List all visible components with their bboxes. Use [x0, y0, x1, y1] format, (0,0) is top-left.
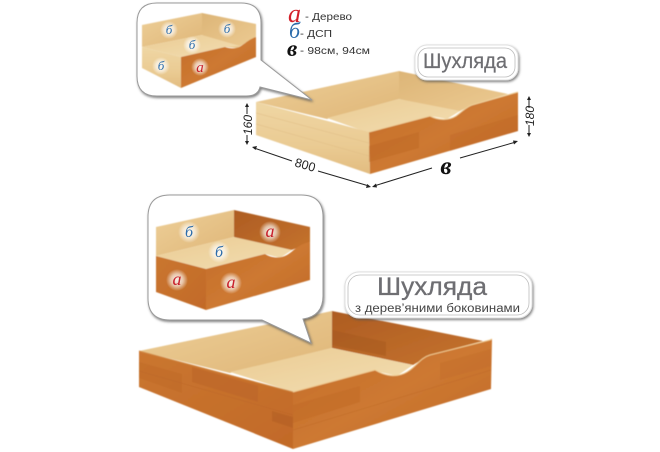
legend: - ДСП	[300, 28, 332, 40]
badge: Шухляда з дерев'яними боковинами: Шухляда	[377, 273, 487, 301]
callout: lower drawer materials	[148, 195, 323, 343]
labels: upper inset letters	[152, 20, 236, 76]
legend: б	[289, 18, 301, 43]
dimension: 160: 160	[241, 115, 255, 135]
badge: Шухляда	[415, 45, 518, 80]
badge: Шухляда з дерев'яними боковинами: з дерев’яними боковинами	[355, 303, 520, 315]
labels: lower inset letters: а	[226, 272, 236, 292]
labels: lower inset letters	[166, 221, 281, 294]
inset: lower drawer corner	[156, 210, 310, 310]
dimension: 800	[252, 146, 371, 188]
dimension: 160	[241, 103, 255, 145]
callout: upper drawer materials	[137, 3, 312, 100]
legend: в	[287, 36, 297, 61]
badge: Шухляда: Шухляда	[423, 50, 507, 73]
dimension: в: в	[440, 153, 452, 180]
labels: lower inset letters: б	[215, 244, 224, 261]
inset: upper drawer corner	[142, 13, 256, 88]
labels: upper inset letters: б	[189, 37, 196, 52]
drawer: lower drawer	[139, 311, 492, 449]
labels: lower inset letters: а	[172, 269, 182, 289]
dimension: 180	[523, 96, 537, 137]
dimension: 180: 180	[523, 106, 537, 126]
labels: upper inset letters: б	[166, 22, 173, 37]
labels: upper inset letters: б	[224, 21, 231, 36]
drawer: upper drawer	[256, 71, 518, 174]
legend: - Дерево	[305, 11, 352, 23]
labels: upper inset letters: б	[158, 58, 165, 73]
labels: lower inset letters: б	[185, 224, 194, 241]
labels: lower inset letters: а	[266, 221, 274, 241]
dimension: в	[372, 140, 518, 188]
labels: upper inset letters: а	[196, 60, 204, 76]
badge: Шухляда з дерев'яними боковинами	[345, 272, 532, 318]
legend: - 98см, 94см	[300, 45, 370, 57]
legend	[287, 0, 370, 61]
dimension: 800: 800	[293, 156, 317, 175]
